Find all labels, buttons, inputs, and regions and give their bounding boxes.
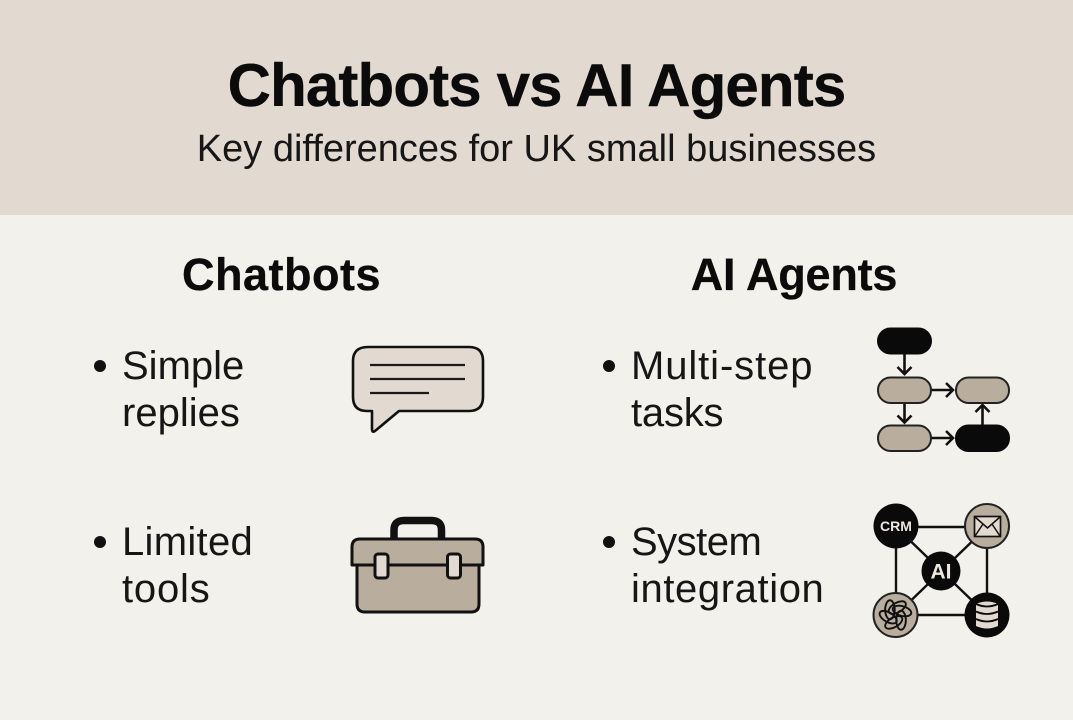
text: simple replies [94,344,244,434]
node: crm: CRM [880,518,912,534]
icon: integration network [872,503,1010,638]
node: assistant knot [874,593,918,637]
text: system integration: System [631,520,761,564]
icon: chat bubble [352,346,484,433]
text: limited tools: Limited [122,520,253,564]
heading: chatbots: Chatbots [182,249,381,300]
panel: ai agents [603,249,897,610]
subtitle: Key differences for UK small businesses [197,128,876,170]
text: simple replies: replies [122,390,240,434]
text: multi-step tasks: tasks [631,390,723,434]
text: limited tools [94,520,253,610]
text: multi-step tasks: Multi-step [631,344,813,388]
node: ai: AI [930,560,952,584]
node: crm [874,504,918,548]
text: multi-step tasks [603,344,813,434]
text: system integration: integration [631,566,824,610]
title: Chatbots vs AI Agents [228,52,845,119]
node: ai [922,552,960,590]
icon: workflow diagram [877,328,1010,452]
node: email [965,504,1009,548]
icon: toolbox [350,516,484,614]
node: database [964,592,1010,638]
text: system integration [603,520,824,610]
heading: ai agents: AI Agents [691,249,897,300]
text: limited tools: tools [122,566,210,610]
text: simple replies: Simple [122,344,244,388]
header band [0,0,1073,215]
panel: chatbots [94,249,381,610]
